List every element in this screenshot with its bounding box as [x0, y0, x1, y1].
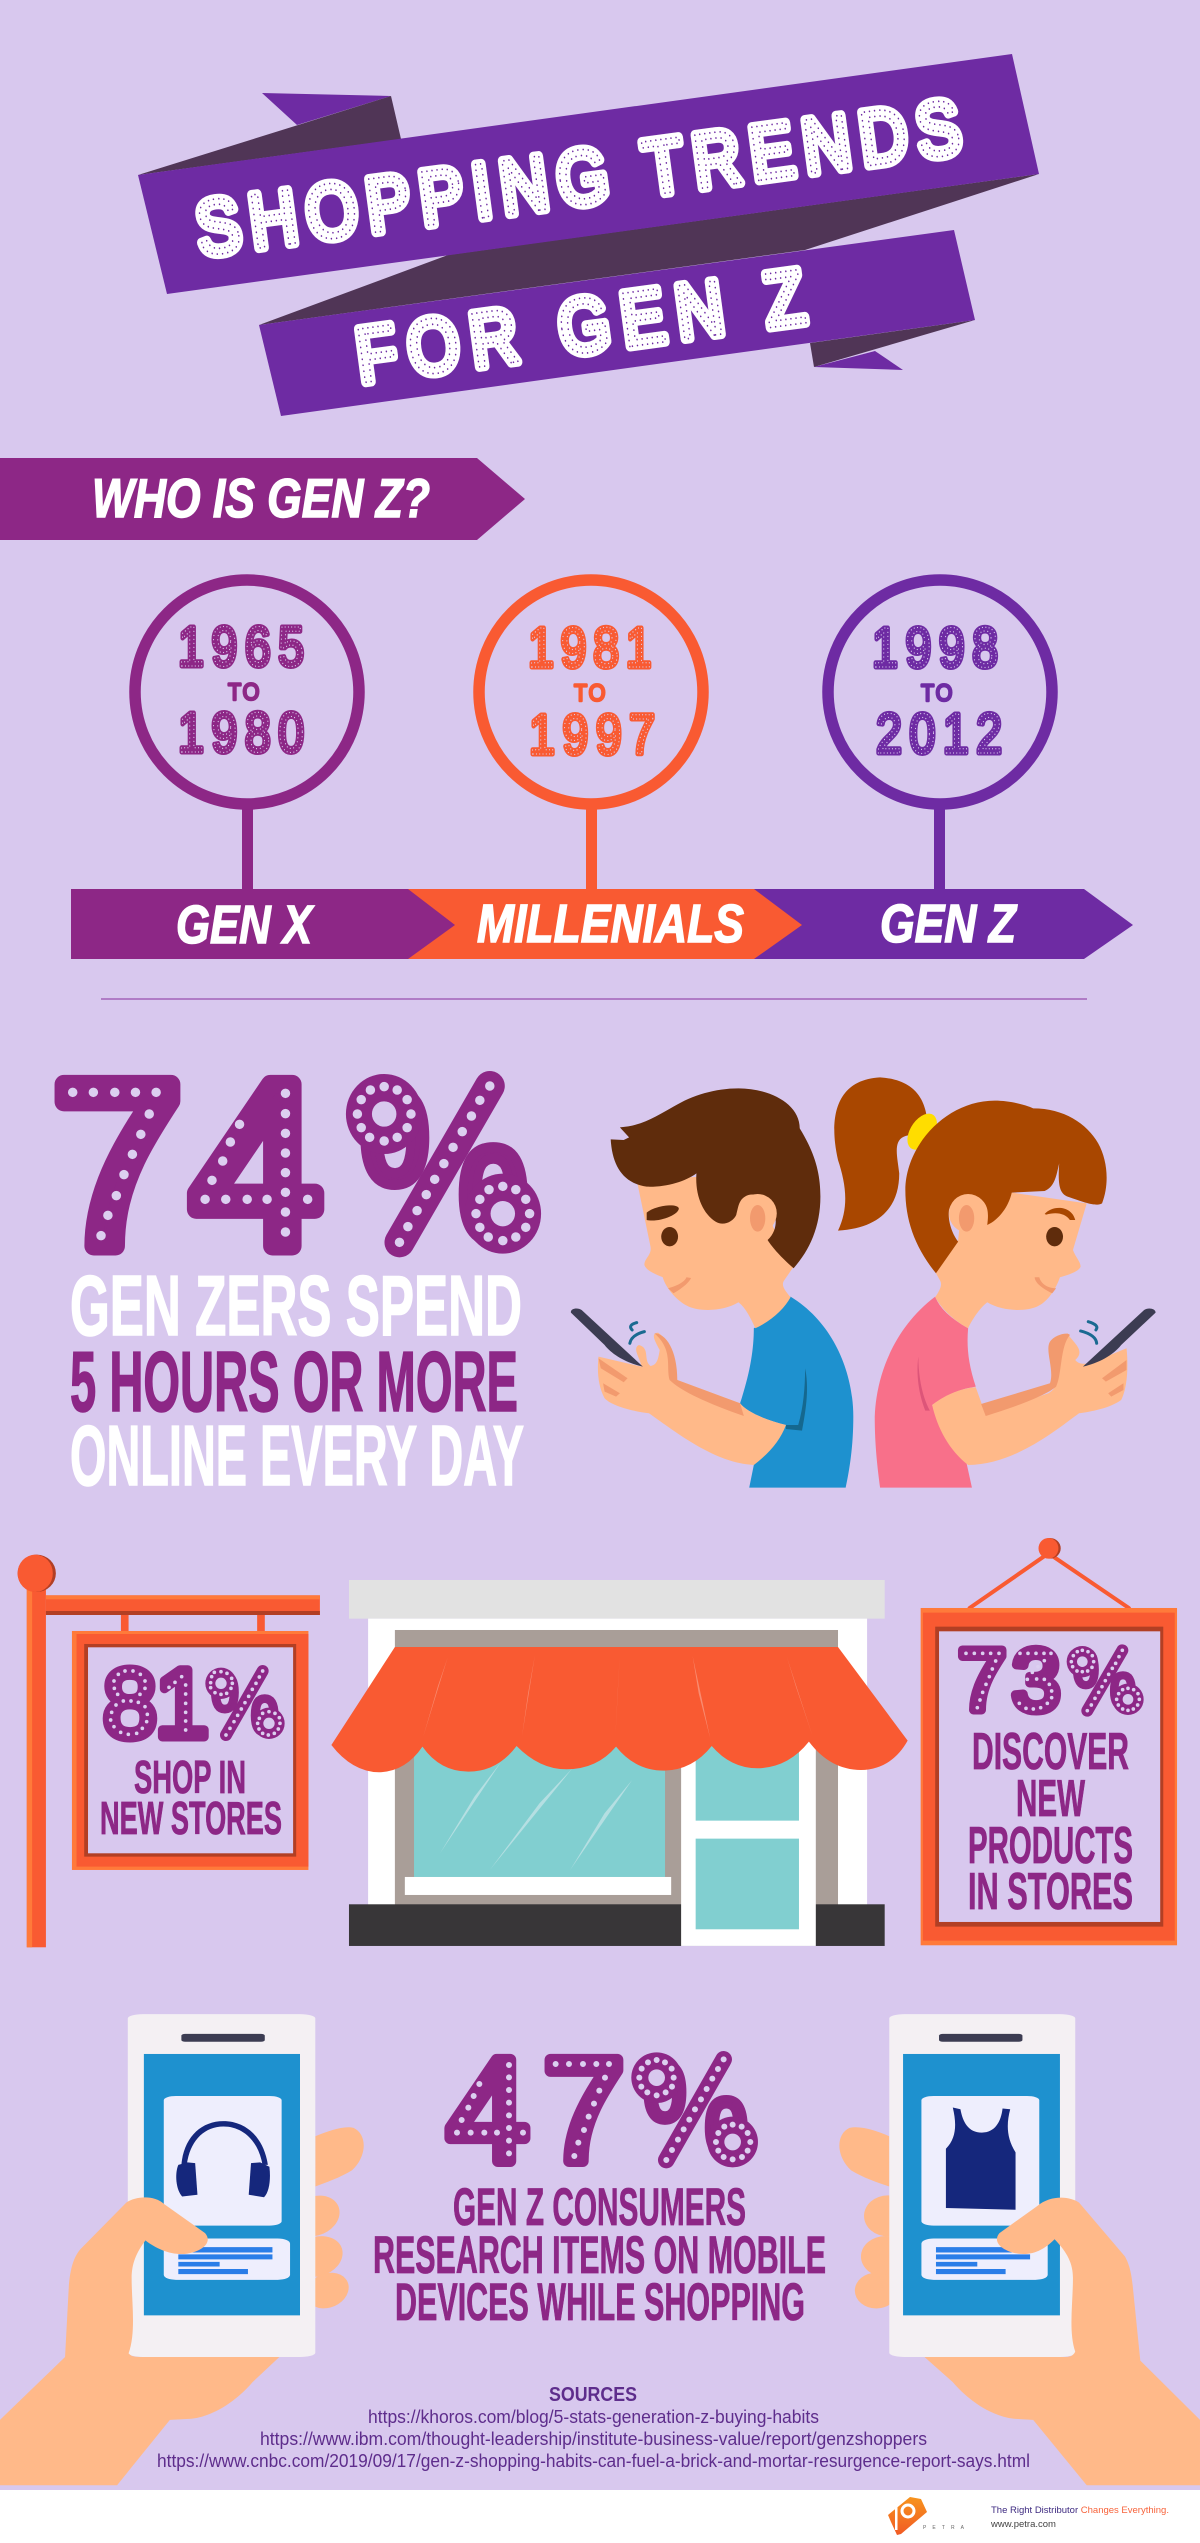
ribbon band: bottom: [259, 230, 975, 416]
girl mouth: [1035, 1277, 1056, 1293]
girl ponytail: [834, 1077, 928, 1231]
store wall: [368, 1619, 867, 1905]
girl shirt: [875, 1297, 976, 1488]
sources heading: SOURCES: [549, 2384, 637, 2406]
source links: https://khoros.com/blog/5-stats-generation-z-buying-habits: [368, 2407, 819, 2427]
shop window: [405, 1720, 671, 1895]
years: millenials: 1997: [529, 704, 662, 767]
store base: [349, 1904, 885, 1946]
arrow segment: gen x: [71, 889, 455, 959]
label: millenials: MILLENIALS: [477, 894, 744, 954]
stat: 73%: [958, 1632, 1144, 1729]
right phone: [889, 2014, 1075, 2357]
girl head: [935, 1183, 1087, 1328]
logo: petra: PETRA: [923, 2525, 965, 2531]
years: gen z: 1998: [872, 617, 1005, 680]
title ribbon: [138, 54, 1039, 416]
caption: shop in new stores: NEW STORES: [100, 1792, 282, 1844]
ribbon tails and folds: [138, 93, 1039, 370]
stat: 81%: %: [210, 1655, 280, 1753]
arrow segment: millenials: [408, 889, 802, 959]
years: millenials: TO: [574, 679, 607, 706]
illustration: storefront: [331, 1580, 908, 1946]
logo: petra: [888, 2497, 965, 2535]
icon: headphones: [176, 2121, 270, 2197]
girl shirt fold: [917, 1357, 930, 1411]
caption: discover new products in stores: NEW: [1016, 1770, 1086, 1828]
label: gen x: GEN X: [176, 895, 314, 955]
caption: GEN Z CONSUMERS: [453, 2178, 746, 2237]
source links: https://www.ibm.com/thought-leadership/institute-business-value/report/genzshoppers: [260, 2429, 927, 2449]
left hand palm and thumb: [0, 2197, 279, 2485]
girl arm: [932, 1333, 1127, 1465]
right fingers: [839, 2127, 911, 2309]
icon: tank top: [946, 2107, 1016, 2210]
store cornice: [349, 1580, 885, 1619]
girl eye: [1046, 1227, 1063, 1246]
years: gen z: 2012: [876, 703, 1009, 766]
caption line 3: ONLINE EVERY DAY: [70, 1409, 524, 1504]
years: gen x: 1965: [178, 616, 311, 679]
left fingers: [286, 2127, 364, 2310]
title line 2: FOR GEN Z: [351, 251, 822, 400]
caption: DEVICES WHILE SHOPPING: [395, 2273, 805, 2332]
right hand palm and thumb: [924, 2198, 1200, 2485]
left phone: [128, 2014, 315, 2357]
girl arm shading: [981, 1334, 1127, 1416]
label: gen z: GEN Z: [880, 894, 1018, 954]
illustration: boy and girl on phones: [571, 1077, 1156, 1488]
ribbon band: top: [138, 54, 1039, 294]
heading: WHO IS GEN Z?: [92, 467, 430, 529]
wall sign frame: [921, 1538, 1177, 1945]
boy ear: [739, 1194, 777, 1233]
awning: [331, 1647, 908, 1772]
sign post and beam: [18, 1555, 320, 1947]
big number 74%: [52, 1033, 541, 1296]
boy mouth: [668, 1277, 691, 1293]
stat: 47%: [373, 2029, 826, 2332]
gen z marker: [828, 580, 1052, 895]
boy eyebrow: [647, 1205, 679, 1221]
arrow segment: gen z: [754, 889, 1133, 959]
years: gen x: TO: [228, 678, 261, 705]
girl: [834, 1077, 1156, 1488]
big number 74%: 74: [52, 1033, 322, 1296]
source links: https://www.cnbc.com/2019/09/17/gen-z-shopping-habits-can-fuel-a-brick-and-mortar-resurgence-report-says.html: [157, 2451, 1030, 2471]
caption: shop in new stores: [100, 1751, 282, 1844]
caption: discover new products in stores: [968, 1723, 1133, 1921]
boy sleeve fold: [786, 1368, 807, 1431]
source links: [157, 2407, 1030, 2471]
boy phone signal: [630, 1323, 644, 1343]
girl eyebrow: [1045, 1208, 1075, 1220]
left hand holding phone: [0, 2014, 364, 2485]
shop door: [681, 1720, 816, 1946]
caption: [373, 2178, 826, 2332]
years: gen x: [178, 616, 311, 765]
girl ear: [949, 1194, 987, 1233]
boy arm: [598, 1333, 786, 1465]
big number 74%: %: [358, 1047, 530, 1286]
girl phone: [1083, 1309, 1156, 1367]
boy head: [637, 1173, 794, 1328]
boy: [571, 1088, 853, 1488]
girl phone signal: [1081, 1322, 1097, 1343]
big number 47%: [447, 2029, 758, 2193]
years: gen z: TO: [921, 679, 954, 706]
millenials marker: [479, 580, 703, 895]
caption: shop in new stores: SHOP IN: [134, 1751, 246, 1803]
store frame: [395, 1630, 838, 1905]
stat: 73%: 73: [958, 1632, 1060, 1729]
hanging street sign with 81%: [18, 1555, 320, 1947]
wall sign with 73%: [921, 1538, 1177, 1945]
title line 1: SHOPPING TRENDS: [191, 82, 975, 273]
caption: RESEARCH ITEMS ON MOBILE: [373, 2226, 826, 2285]
gen x marker: [135, 580, 359, 895]
stat: 81%: [103, 1649, 285, 1758]
years: gen z: [872, 617, 1009, 766]
big number 47%: %: [642, 2036, 749, 2185]
boy eye: [661, 1227, 678, 1246]
sources: [157, 2384, 1030, 2471]
years: millenials: 1981: [528, 617, 658, 680]
boy phone: [571, 1309, 643, 1367]
footer: [0, 2490, 1200, 2543]
section banner: who is gen z: [0, 458, 525, 540]
girl scrunchie: [902, 1113, 942, 1151]
website: www.petra.com: [990, 2519, 1056, 2530]
stat: 81%: 81: [103, 1649, 209, 1758]
right hand holding phone: [839, 2014, 1200, 2485]
girl hair: [905, 1101, 1107, 1273]
tagline: The Right Distributor Changes Everything.: [991, 2505, 1169, 2516]
stat: 74%: [52, 1033, 541, 1504]
boy arm shading: [598, 1333, 744, 1416]
stat: 73%: %: [1072, 1635, 1137, 1726]
generation timeline: [71, 580, 1133, 959]
caption line 1: GEN ZERS SPEND: [70, 1259, 522, 1354]
big number 47%: 47: [447, 2029, 625, 2193]
years: millenials: [528, 617, 662, 767]
boy shirt: [740, 1297, 853, 1488]
caption line 2: 5 HOURS OR MORE: [70, 1335, 518, 1430]
years: gen x: 1980: [178, 702, 311, 765]
boy hair: [611, 1088, 820, 1268]
